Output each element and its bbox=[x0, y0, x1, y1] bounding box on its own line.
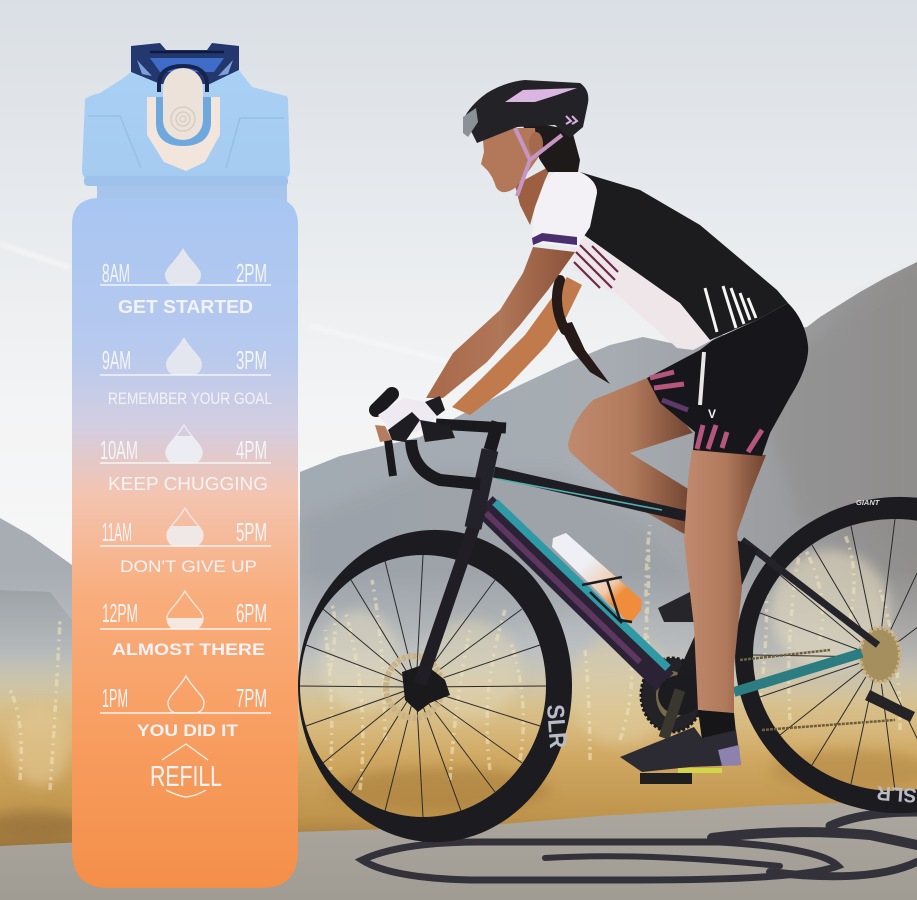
sunglasses bbox=[463, 108, 478, 137]
marker: 11AM bbox=[100, 508, 271, 576]
marker: 9AM: 9AM bbox=[102, 345, 131, 375]
front hub and caliper bbox=[402, 664, 450, 712]
helmet bbox=[463, 80, 588, 143]
marker: 1PM: 7PM bbox=[236, 683, 267, 713]
rear bicycle wheel bbox=[735, 497, 917, 813]
marker: 1PM: YOU DID IT bbox=[137, 721, 239, 740]
marker: 12PM bbox=[100, 591, 271, 659]
marker: 11AM: 11AM bbox=[102, 517, 132, 547]
down tube bbox=[484, 505, 665, 682]
rear rim lettering: SLR bbox=[875, 781, 917, 806]
bottom bracket bbox=[658, 675, 702, 715]
marker: 8AM: 8AM bbox=[102, 258, 130, 288]
marker: 9AM: 3PM bbox=[236, 345, 267, 375]
bottle on bike bbox=[552, 533, 642, 624]
marker: 10AM: 4PM bbox=[236, 435, 267, 465]
marker: 9AM bbox=[100, 337, 272, 408]
glove bbox=[375, 396, 455, 442]
cycling shoe bbox=[620, 727, 741, 784]
wheel shadow on road bbox=[362, 812, 917, 880]
marker: 1PM: 1PM bbox=[102, 683, 128, 713]
braid bbox=[557, 280, 565, 330]
bottle body bbox=[72, 198, 298, 888]
marker: 8AM: 2PM bbox=[236, 258, 267, 288]
shorts pink stripes bbox=[650, 372, 762, 452]
helmet strap bbox=[515, 128, 562, 196]
bottle lid top bbox=[131, 43, 239, 84]
front bicycle wheel bbox=[298, 530, 572, 842]
water bottle bbox=[72, 43, 298, 888]
far arm bbox=[452, 277, 582, 415]
background: far mountains bbox=[0, 244, 917, 720]
handlebar and brake lever bbox=[376, 394, 506, 484]
marker: 12PM: ALMOST THERE bbox=[112, 640, 265, 659]
far shoe bbox=[658, 592, 694, 622]
rear derailleur and chain bbox=[740, 650, 915, 730]
marker: 11AM: DON'T GIVE UP bbox=[120, 557, 257, 576]
ear bbox=[529, 132, 543, 156]
refill logo: REFILL bbox=[150, 761, 222, 793]
shorts white side stripe bbox=[700, 352, 704, 405]
marker: 10AM bbox=[100, 425, 271, 494]
crank bbox=[664, 690, 680, 738]
marker: 8AM: GET STARTED bbox=[118, 297, 253, 317]
marker: 10AM: KEEP CHUGGING bbox=[108, 474, 268, 494]
fork bbox=[420, 520, 476, 684]
marker: 10AM: 10AM bbox=[100, 435, 138, 465]
background: golden grass bbox=[0, 550, 917, 850]
chainring bbox=[641, 658, 703, 732]
marker: 12PM: 6PM bbox=[236, 598, 267, 628]
shorts logo: V bbox=[708, 407, 716, 421]
sock bbox=[698, 710, 736, 740]
marker: 12PM: 12PM bbox=[102, 598, 138, 628]
near arm bbox=[426, 247, 575, 398]
rear cassette bbox=[860, 628, 900, 682]
bottle cap bbox=[82, 70, 290, 179]
neck and head bbox=[463, 80, 588, 225]
seat tube bbox=[680, 545, 748, 695]
marker: 9AM: REMEMBER YOUR GOAL bbox=[108, 390, 272, 408]
bicycle frame bbox=[420, 450, 878, 738]
shorts bbox=[647, 303, 808, 456]
rim brand text: GIANT bbox=[856, 498, 881, 507]
marker: 1PM bbox=[100, 676, 271, 740]
head tube bbox=[473, 450, 490, 528]
road bbox=[0, 800, 917, 900]
front brake disc bbox=[386, 656, 442, 718]
far leg bbox=[568, 378, 693, 535]
top tube bbox=[494, 472, 686, 516]
cap clip bbox=[147, 66, 220, 171]
bottle neck bbox=[97, 180, 287, 204]
seat stay bbox=[742, 540, 878, 645]
marker: 11AM: 5PM bbox=[236, 517, 267, 547]
near leg bbox=[684, 450, 766, 713]
chain stay bbox=[734, 653, 862, 692]
refill logo bbox=[150, 744, 222, 797]
grass wisps bbox=[10, 525, 900, 790]
front rim lettering: SLR bbox=[542, 703, 572, 750]
jersey bbox=[532, 170, 788, 350]
marker: 8AM bbox=[100, 248, 271, 317]
pedal bbox=[640, 773, 692, 784]
